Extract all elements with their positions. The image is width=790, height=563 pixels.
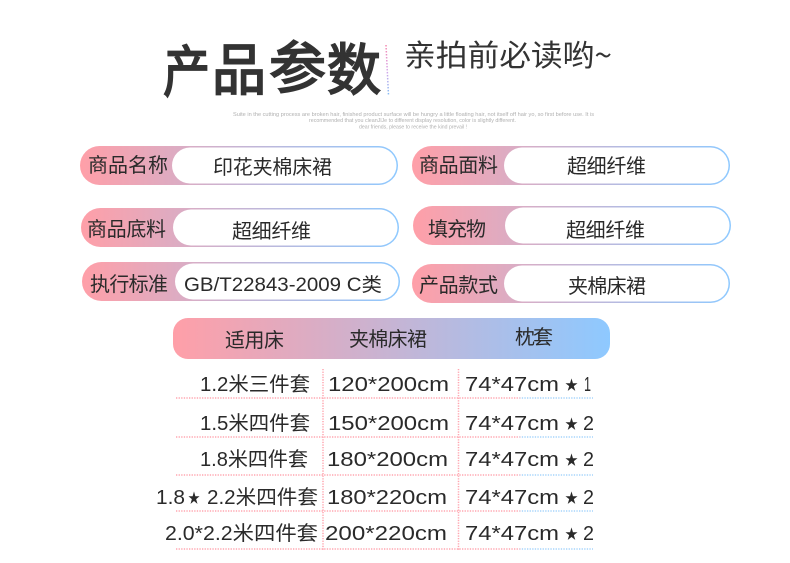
panel: product name: 商品名称 — [88, 149, 168, 178]
panel: product style — [412, 264, 730, 303]
table row: 1.5m: 2 — [583, 413, 594, 435]
table row: 1.5m — [200, 412, 594, 435]
table row: 2.0x2.2m: 2.0*2.2米四件套 — [165, 522, 318, 545]
table grid lines — [176, 369, 593, 550]
fine print note — [233, 112, 594, 130]
table row: 1.2m — [200, 373, 591, 396]
table row: 1.8x2.2m: ★ — [565, 490, 578, 506]
title: 数 — [327, 26, 381, 107]
panel: standard: GB/T22843-2009 C类 — [184, 274, 382, 296]
table row: 1.2m: 74*47cm — [465, 374, 559, 396]
panel: surface fabric: 超细纤维 — [567, 150, 646, 179]
table row: 2.0x2.2m: 200*220cm — [325, 523, 447, 545]
panel: standard — [82, 262, 400, 301]
table row: 1.8m: 1.8米四件套 — [200, 448, 308, 471]
table header bar: 适用床 — [225, 324, 284, 353]
table row: 1.8m: ★ — [565, 452, 578, 468]
table row: 1.5m: 150*200cm — [328, 413, 449, 435]
table row: 1.2m: 120*200cm — [328, 374, 449, 396]
table row: 1.8x2.2m: 2 — [583, 487, 594, 509]
panel: base fabric: 超细纤维 — [232, 215, 311, 244]
table header bar — [173, 318, 610, 359]
table header bar: 夹棉床裙 — [349, 323, 427, 352]
table row: 1.8m: 2 — [583, 449, 594, 471]
panel: product name — [80, 146, 398, 185]
title: 参 — [269, 24, 326, 105]
panel: standard: 执行标准 — [90, 268, 168, 297]
fine print note: recommended that you cleanJlJe to different display resolution, color is slightly different. — [309, 118, 516, 124]
panel: filling: 填充物 — [428, 213, 486, 242]
panel: product name: 印花夹棉床裙 — [213, 151, 332, 180]
panel: filling: 超细纤维 — [566, 214, 645, 243]
panel: product style: 产品款式 — [419, 269, 498, 298]
panel: filling — [413, 206, 731, 245]
table row: 1.5m: 1.5米四件套 — [200, 412, 310, 435]
panel: base fabric — [81, 208, 399, 247]
table row: 1.5m: 74*47cm — [465, 413, 559, 435]
table row: 1.8x2.2m: 74*47cm — [465, 487, 559, 509]
fine print note: Suite in the cutting process are broken hair, finished product surface will be hungry a little floating hair, not itself off hair yo, so first before use. It is — [233, 112, 594, 118]
title — [163, 24, 381, 109]
table row: 1.2m: ★ — [565, 377, 578, 393]
table row: 1.8m: 180*200cm — [327, 449, 448, 471]
panel: product style: 夹棉床裙 — [568, 270, 646, 299]
table row: 1.2m: 1 — [584, 374, 591, 396]
table row: 1.8x2.2m: 1.8 — [156, 487, 185, 509]
title: 产 — [163, 28, 210, 109]
table row: 2.0x2.2m: 2 — [583, 523, 594, 545]
title: 品 — [212, 26, 266, 107]
subtitle: 亲拍前必读哟~ — [404, 31, 612, 75]
fine print note: dear friends, please to receive the kind prevail ! — [359, 124, 467, 130]
panel: surface fabric — [412, 146, 730, 185]
panel: surface fabric: 商品面料 — [419, 149, 498, 178]
table row: 1.5m: ★ — [565, 416, 578, 432]
panel: base fabric: 商品底料 — [87, 213, 166, 242]
table row: 1.8x2.2m: 180*220cm — [327, 487, 447, 509]
table row: 1.2m: 1.2米三件套 — [200, 373, 310, 396]
table row: 1.8x2.2m: ★ — [188, 490, 200, 506]
table row: 1.8m — [200, 448, 594, 471]
table row: 1.8x2.2m: 2.2米四件套 — [207, 486, 318, 509]
table row: 2.0x2.2m: ★ — [565, 526, 578, 542]
title divider dotted line — [386, 45, 388, 95]
table row: 2.0x2.2m — [165, 522, 594, 545]
table header bar: 枕套 — [515, 321, 553, 350]
table row: 1.8m: 74*47cm — [465, 449, 559, 471]
table row: 1.8x2.2m — [156, 486, 594, 509]
table row: 2.0x2.2m: 74*47cm — [465, 523, 559, 545]
